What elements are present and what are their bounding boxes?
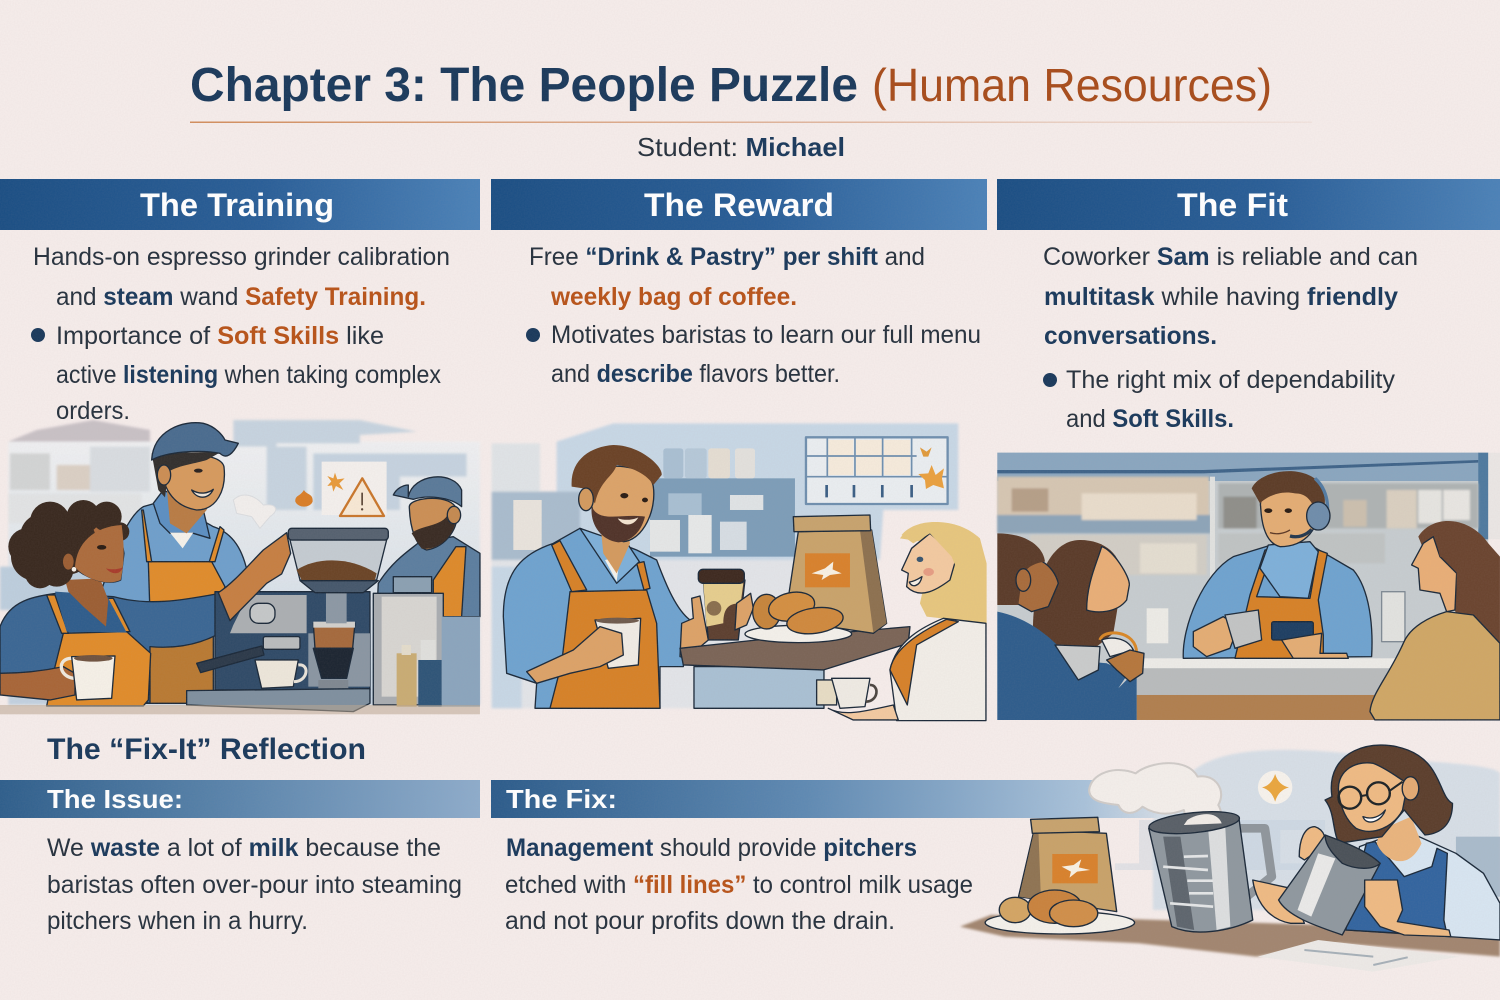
- heading: the fix: [491, 780, 1191, 818]
- heading: the fit: The Fit: [1177, 187, 1288, 223]
- fit text: and Soft Skills.: [1066, 405, 1234, 433]
- fit text: Coworker Sam is reliable and can: [1043, 243, 1418, 271]
- illustration: baristas at grinder: [0, 420, 480, 714]
- fit text: conversations.: [1044, 322, 1217, 350]
- training text: and steam wand Safety Training.: [56, 283, 426, 311]
- fit text: [1043, 243, 1418, 433]
- fix text: [505, 834, 973, 935]
- heading: the reward: The Reward: [644, 187, 834, 223]
- reward text: [526, 243, 981, 388]
- issue text: [47, 834, 462, 935]
- issue text: pitchers when in a hurry.: [47, 907, 308, 935]
- counter with pastry and coffee bag: [680, 515, 910, 670]
- fix text: etched with “fill lines” to control milk usage: [505, 871, 973, 899]
- heading: the issue: [0, 780, 480, 818]
- training text: orders.: [56, 397, 130, 425]
- title: (Human Resources): [872, 59, 1272, 111]
- panel: the issue: [0, 780, 480, 935]
- heading: the training: [0, 179, 480, 230]
- training text: [31, 243, 450, 425]
- training text: active listening when taking complex: [56, 361, 441, 389]
- pastry plate: [985, 890, 1135, 934]
- coffee bag: [1019, 817, 1117, 912]
- paper sheet: [1258, 940, 1459, 972]
- right barista: [377, 477, 480, 617]
- training text: Importance of Soft Skills like: [56, 322, 384, 350]
- espresso machine and grinder: [187, 528, 480, 712]
- fit text: multitask while having friendly: [1044, 283, 1398, 311]
- heading: the fit: [997, 179, 1500, 230]
- barista with headset: [1183, 471, 1372, 658]
- panel: the fit: [990, 179, 1500, 731]
- title: Chapter 3: The People Puzzle: [190, 59, 858, 112]
- icon: sparkle: [1258, 771, 1292, 804]
- center barista: [100, 423, 248, 703]
- barista with beard: [503, 445, 753, 708]
- coffee bag: [785, 515, 887, 633]
- student line: Student: Michael: [637, 132, 845, 162]
- left customers: [997, 533, 1144, 720]
- issue text: baristas often over-pour into steaming: [47, 871, 462, 899]
- reward text: Free “Drink & Pastry” per shift and: [529, 243, 925, 271]
- barista with glasses: [1253, 745, 1500, 940]
- fix text: and not pour profits down the drain.: [505, 907, 895, 935]
- fit text: The right mix of dependability: [1066, 366, 1396, 394]
- heading: the fix: The Fix:: [506, 784, 617, 814]
- customer with blonde hair: [817, 522, 987, 721]
- left barista: [0, 500, 243, 706]
- reward text: and describe flavors better.: [551, 360, 840, 388]
- fix text: Management should provide pitchers: [506, 834, 917, 862]
- reward text: Motivates baristas to learn our full menu: [551, 321, 981, 349]
- counter: [960, 915, 1500, 957]
- reward text: weekly bag of coffee.: [550, 283, 797, 311]
- illustration: barista with customers: [990, 453, 1500, 731]
- heading: the training: The Training: [140, 187, 334, 223]
- illustration: barista serving coffee and pastry: [492, 423, 987, 721]
- heading: the issue: The Issue:: [47, 784, 183, 814]
- issue text: We waste a lot of milk because the: [47, 834, 441, 862]
- illustration: barista with milk pitchers: [960, 745, 1500, 972]
- counter: [1137, 658, 1400, 720]
- large steel pitcher: [1148, 808, 1272, 932]
- barista forearm and hand on grinder: [218, 533, 291, 621]
- title: [190, 59, 1312, 123]
- schedule board: [806, 437, 948, 504]
- heading: the reward: [491, 179, 987, 230]
- training text: Hands-on espresso grinder calibration: [33, 243, 450, 271]
- panel: the training: [0, 179, 480, 714]
- right customer: [1370, 521, 1500, 720]
- panel: the reward: [491, 179, 987, 721]
- panel: the fix: [491, 745, 1500, 972]
- icon: warning triangle: [340, 478, 384, 516]
- reflection heading: The “Fix-It” Reflection: [47, 733, 366, 766]
- steam cloud: [1089, 763, 1221, 825]
